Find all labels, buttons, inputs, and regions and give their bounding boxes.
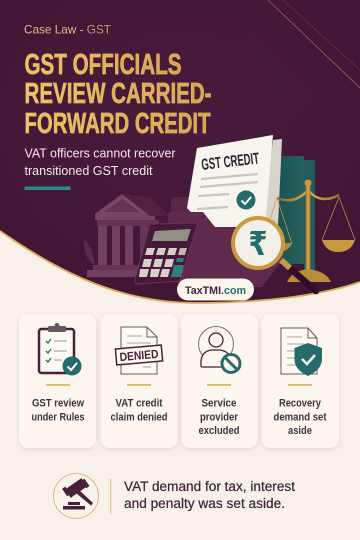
icon: document with shield [281, 328, 322, 376]
icon: person with prohibited sign [198, 326, 240, 372]
icon: gavel in circle [54, 474, 98, 518]
category label: Case Law - GST [24, 22, 112, 36]
conclusion text [124, 479, 295, 511]
title: GST OFFICIALS [24, 49, 182, 81]
card 3: Service provider excluded [181, 314, 258, 448]
subtitle: VAT officers cannot recover [24, 146, 176, 160]
card 3: Service provider excluded: Service [202, 398, 236, 410]
illustration: document GST CREDIT [187, 135, 282, 228]
card 4: Recovery demand set aside: demand set [274, 412, 327, 424]
illustration: folder front [168, 212, 282, 287]
title: FORWARD CREDIT [24, 108, 211, 140]
card 1: GST review under Rules: GST review [32, 398, 84, 410]
illustration: document GST CREDIT: GST CREDIT [201, 151, 260, 174]
illustration: magnifying glass with rupee: ₹ [248, 224, 268, 263]
card 3: Service provider excluded: excluded [198, 425, 240, 437]
divider [110, 479, 111, 514]
illustration: calculator [135, 223, 197, 284]
card 2: VAT credit claim denied [100, 314, 178, 448]
subtitle: transitioned GST credit [24, 164, 153, 178]
site badge [177, 278, 254, 300]
illustration: scales of justice [262, 180, 355, 282]
site badge: TaxTMI.com [185, 285, 246, 297]
card 1: GST review under Rules [19, 314, 96, 448]
hero panel [0, 0, 360, 303]
illustration: magnifying glass with rupee [231, 216, 316, 291]
card 4: Recovery demand set aside: aside [288, 425, 312, 437]
subtitle [24, 146, 176, 178]
illustration: green books [277, 156, 315, 270]
title: REVIEW CARRIED- [24, 78, 212, 110]
icon: denied document: DENIED [119, 347, 159, 364]
accent bar [24, 186, 70, 190]
card 2: VAT credit claim denied: VAT credit [116, 398, 163, 410]
card 1: GST review under Rules: under Rules [32, 412, 84, 424]
card 4: Recovery demand set aside: Recovery [279, 398, 322, 410]
card 4: Recovery demand set aside [262, 314, 339, 448]
conclusion text: VAT demand for tax, interest [124, 479, 295, 494]
title [24, 49, 212, 140]
conclusion text: and penalty was set aside. [124, 496, 285, 511]
card 2: VAT credit claim denied: claim denied [110, 412, 168, 424]
card 3: Service provider excluded: provider [200, 412, 239, 424]
illustration: folder back [171, 197, 190, 280]
icon: clipboard check [39, 323, 82, 376]
illustration: courthouse [84, 194, 170, 277]
